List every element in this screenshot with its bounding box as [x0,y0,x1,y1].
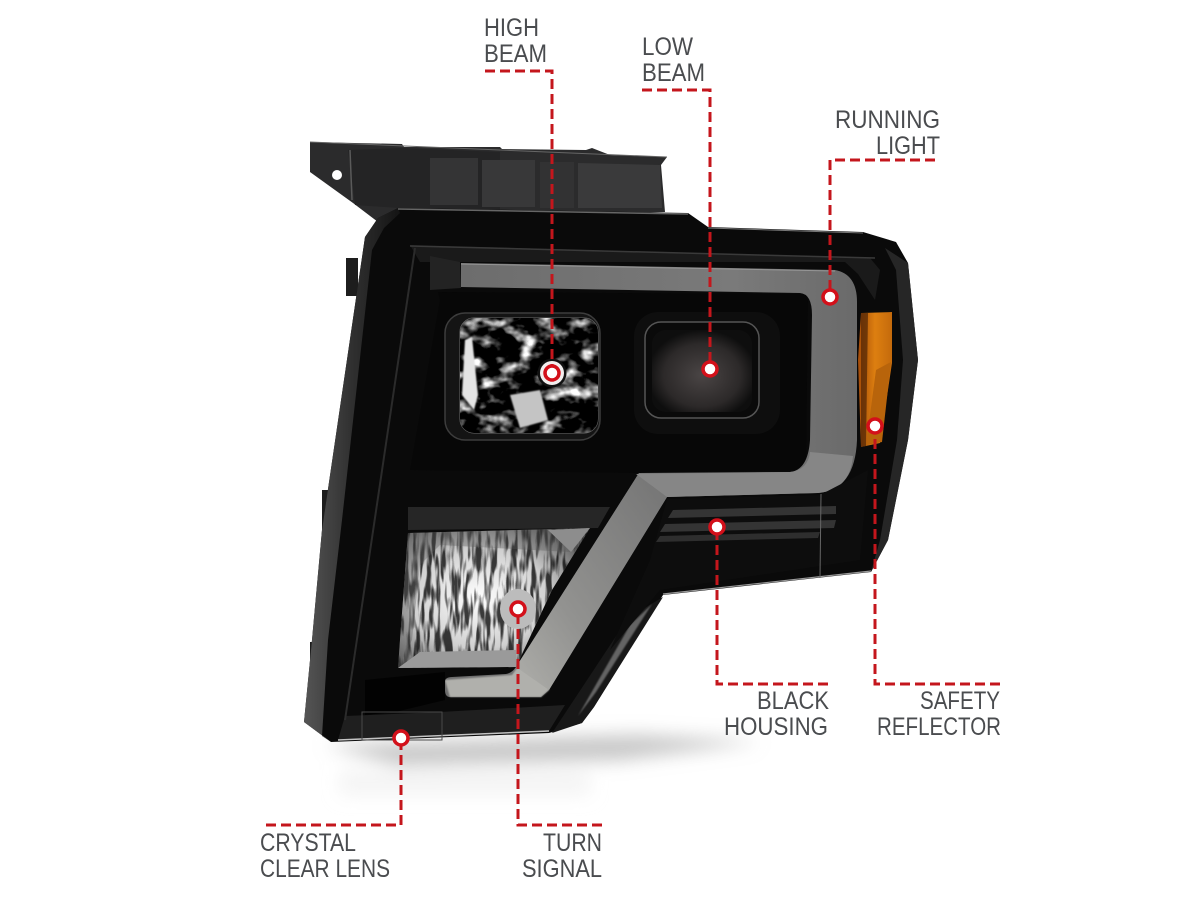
callout: low beam [642,33,717,376]
label: safety reflector [877,687,1001,741]
label: black housing [724,687,829,741]
infographic: annotated headlight [261,18,1000,877]
label: high beam [484,14,547,68]
top trim [410,245,880,300]
label: crystal clear lens [260,829,390,883]
black housing ribs [610,470,868,650]
side tabs [310,258,358,678]
label: turn signal: SIGNAL [522,855,602,883]
label: high beam: BEAM [484,40,547,68]
mounting bracket [310,142,667,222]
label: running light [835,106,940,160]
floor shadow [325,735,760,795]
callout: turn signal [511,602,602,883]
high beam projector [445,313,600,440]
upper-left trim block [430,256,461,290]
label: turn signal [522,829,602,883]
label: safety reflector: SAFETY [920,687,1000,715]
label: safety reflector: REFLECTOR [877,713,1001,741]
turn signal lens [398,528,590,668]
label: high beam: HIGH [484,14,539,42]
bottom clear strip [338,705,565,740]
callout: crystal clear lens [260,731,408,883]
running light band [445,263,857,697]
callout: high beam [484,14,559,380]
headlight assembly [304,142,918,742]
label: low beam [642,33,705,87]
outer housing [304,208,918,742]
label: crystal clear lens: CRYSTAL [260,829,356,857]
label: low beam: BEAM [642,59,705,87]
right outer rim [871,248,918,572]
label: running light: RUNNING [835,106,940,134]
label: black housing: BLACK [757,687,829,715]
callout: running light [823,106,940,304]
label: low beam: LOW [642,33,693,61]
inner black panel [410,292,808,473]
amber safety reflector [858,312,892,447]
label: turn signal: TURN [543,829,602,857]
mid bar [408,475,636,497]
lower lens piece [552,597,663,733]
clear outer lens rim [304,208,400,742]
label: running light: LIGHT [876,132,940,160]
lower corner block [365,672,445,715]
bottom corner detail [362,712,442,740]
label: black housing: HOUSING [724,713,828,741]
label: crystal clear lens: CLEAR LENS [260,855,390,883]
callout: safety reflector [868,419,1001,741]
callout: black housing [710,520,829,741]
low beam projector [634,312,780,434]
